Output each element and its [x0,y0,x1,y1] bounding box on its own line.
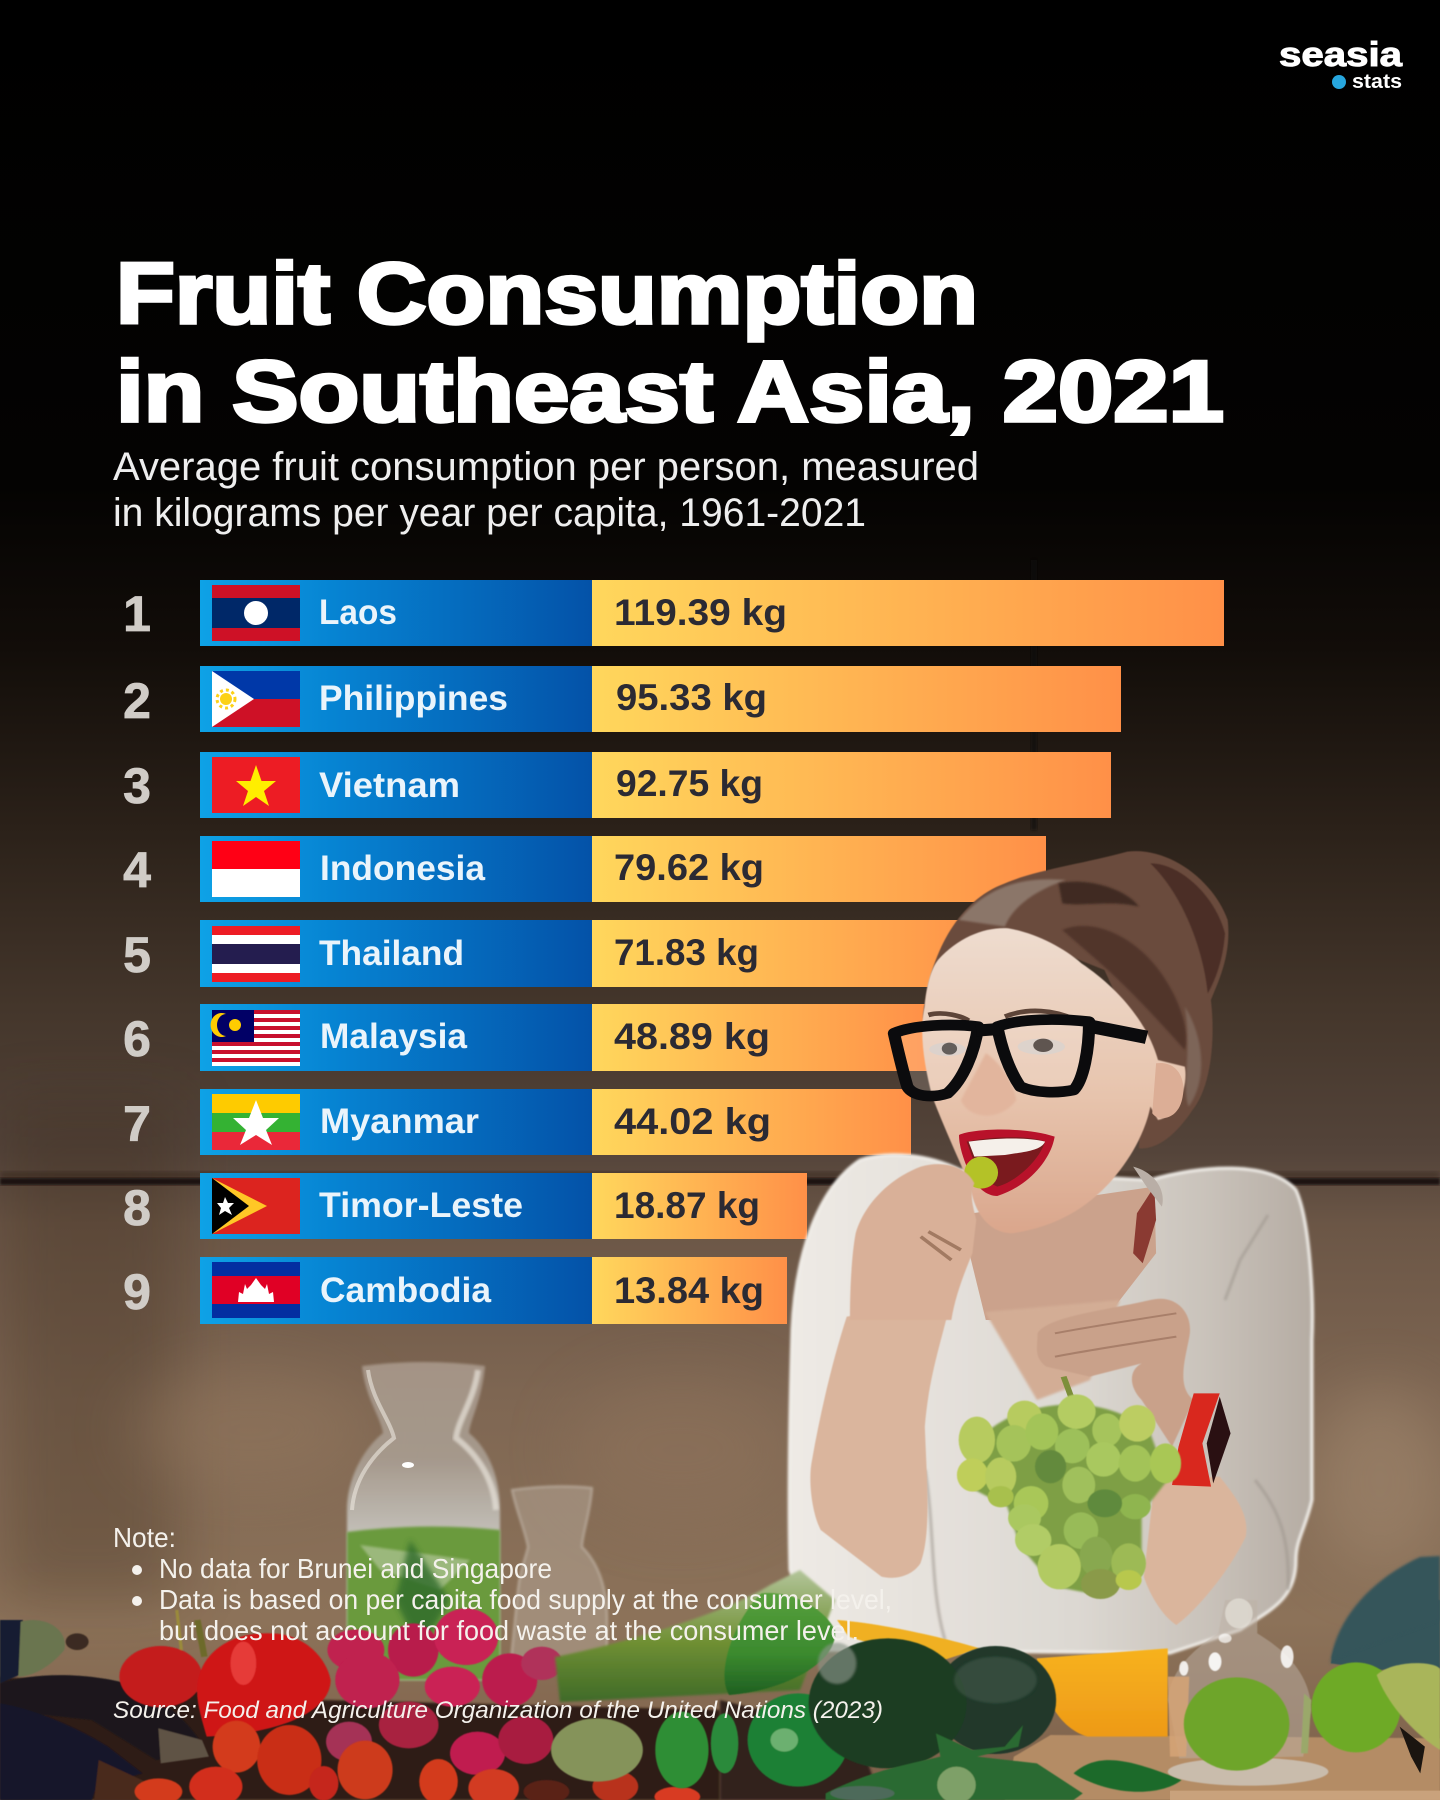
dark ground [0,1677,720,1800]
row 1: Laos [200,580,1224,646]
dark ground [720,1700,881,1800]
note: but does not account for food waste at the consumer level. [159,1615,859,1646]
glass jar [1168,1598,1328,1786]
rank numbers: 1 [123,586,151,642]
red peppers [119,1610,331,1737]
row 7: Myanmar [200,1089,911,1155]
country names: Philippines [319,679,508,718]
lime in jar [1184,1677,1289,1771]
values: 119.39 kg [614,592,787,633]
grape bunch [957,1377,1181,1599]
glasses [894,1020,1089,1096]
values: 79.62 kg [614,847,764,888]
neck and chest [969,1167,1163,1320]
broccoli base [1331,1600,1440,1670]
flag: Myanmar [212,1094,300,1150]
rank numbers: 3 [123,758,151,814]
row 6: Malaysia [200,1004,928,1071]
eyes [929,1043,966,1056]
lower green peppers [711,1693,849,1787]
rank numbers: 5 [123,927,151,983]
woman eating grapes [789,851,1312,1653]
rank numbers: 4 [123,842,151,898]
flags [211,585,300,1318]
values [614,592,787,1311]
avocados [809,1638,1056,1768]
subtitle: in kilograms per year per capita, 1961-2021 [113,491,866,535]
note: Note: [113,1522,176,1553]
large green pepper [724,1593,835,1695]
top yellow squash slice [837,1620,979,1663]
right forearm [1144,1477,1246,1625]
flag: Thailand [212,926,300,982]
note [113,1522,892,1646]
grape in mouth [964,1157,998,1189]
basil leaves [826,1725,1181,1800]
flag: Malaysia [211,1010,300,1066]
flag: Vietnam [212,757,300,813]
small glass carafe [510,1486,607,1670]
wooden table [1005,1735,1440,1800]
smart watch [1172,1393,1231,1487]
values: 13.84 kg [614,1270,764,1311]
logo: seasia stats: stats [1352,71,1402,93]
zucchini [555,1570,835,1702]
green pepper [655,1712,709,1788]
broccoli [1330,1556,1440,1665]
orange squash [1037,1648,1168,1737]
row 2: Philippines [200,666,1121,732]
flag: Laos [212,585,300,641]
logo dot [1332,75,1346,89]
left hand [850,1164,976,1320]
flag: Timor-Leste [212,1178,300,1234]
country names: Cambodia [320,1271,492,1310]
flag: Cambodia [212,1262,300,1318]
country names: Thailand [319,934,464,973]
subtitle [113,445,979,535]
left forearm [810,1300,951,1578]
country names: Timor-Leste [319,1186,523,1225]
mouth [959,1130,1055,1196]
country names: Myanmar [320,1102,479,1141]
country names: Laos [319,593,397,632]
shadow under fruit [1400,1727,1425,1773]
values: 71.83 kg [614,932,759,973]
carafes behind vegetables [347,1362,607,1680]
right hand [1037,1299,1194,1447]
title: Fruit Consumption [116,246,978,342]
row 3: Vietnam [200,752,1111,818]
values: 95.33 kg [616,677,767,718]
shirt [789,1155,1312,1653]
face [894,928,1186,1233]
tomatoes [135,1721,700,1800]
row 5: Thailand [200,920,1000,987]
values: 44.02 kg [614,1101,771,1142]
shirt folds [925,1215,1288,1640]
logo: seasia stats [1279,36,1403,93]
row 9: Cambodia [200,1257,787,1324]
ear [1152,1063,1183,1118]
note: No data for Brunei and Singapore [159,1553,552,1584]
country names: Vietnam [319,766,460,805]
country names: Malaysia [320,1017,468,1056]
rank numbers [123,586,151,1320]
row 4: Indonesia [200,836,1046,902]
rank numbers: 9 [123,1264,151,1320]
flag: Philippines [212,671,300,727]
values: 18.87 kg [614,1185,760,1226]
title: in Southeast Asia, 2021 [116,344,1224,440]
row 8: Timor-Leste [200,1173,807,1239]
cut lime [1377,1663,1440,1750]
large water carafe [347,1362,500,1680]
country names: Indonesia [320,849,486,888]
rank numbers: 2 [123,673,151,729]
rank numbers: 8 [123,1180,151,1236]
hair [923,851,1228,1148]
values: 48.89 kg [614,1016,770,1057]
country names [319,593,523,1310]
nose [961,1053,1016,1116]
title [116,246,1224,440]
vegetables and fruit: left foreground [0,1608,720,1800]
eggplants [0,1620,209,1800]
round green fruit [551,1718,643,1782]
note: Data is based on per capita food supply at the consumer level, [159,1584,892,1615]
table front strip [1170,1791,1440,1800]
chest V [985,1300,1120,1400]
flag: Indonesia [212,841,300,897]
lime [1311,1662,1401,1752]
rank numbers: 7 [123,1096,151,1152]
radishes [326,1608,563,1775]
vegetables and fruit: right foreground [711,1593,1440,1800]
values: 92.75 kg [616,763,763,804]
eyebrows [928,1013,969,1021]
rank numbers: 6 [123,1011,151,1067]
bar chart: ranking rows [200,580,1224,1324]
subtitle: Average fruit consumption per person, measured [113,445,979,489]
logo: seasia stats: seasia [1279,36,1403,74]
source: Source: Food and Agriculture Organization of the United Nations (2023) [113,1697,883,1724]
